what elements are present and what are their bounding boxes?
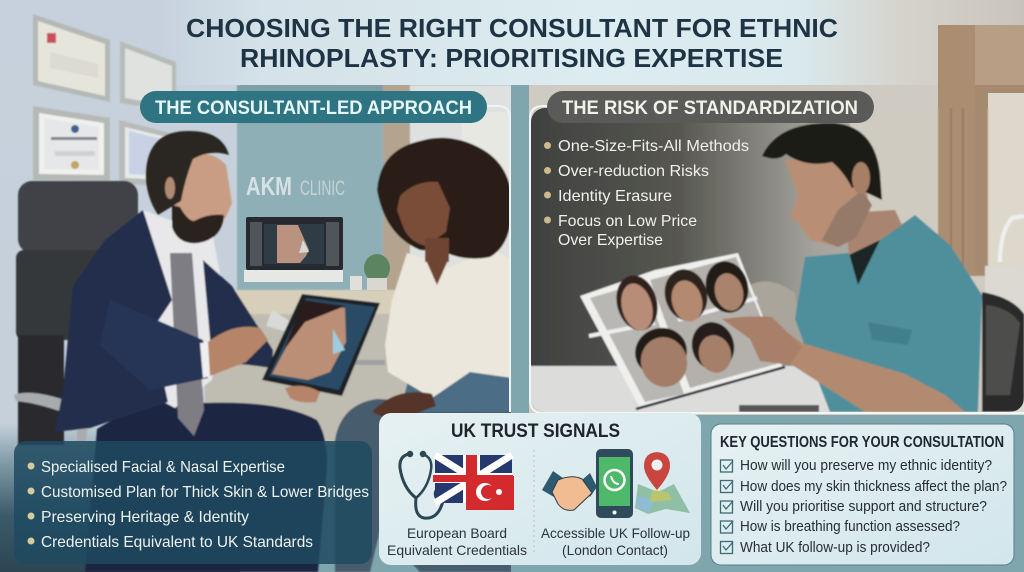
label: credentials: European Board [407, 525, 507, 541]
legs [335, 399, 512, 572]
frame: left panel border [470, 106, 510, 412]
certificate 4 [119, 120, 178, 185]
checklist: Will you prioritise support and structure? [740, 498, 987, 515]
checklist [720, 457, 1007, 556]
label: credentials [387, 525, 527, 558]
wood slats [938, 25, 1024, 275]
icon: map pin [635, 452, 690, 514]
panel: consultant bullet list: Preserving Heritage & Identity [41, 509, 249, 526]
checklist: How is breathing function assessed? [740, 518, 960, 535]
teal divider [512, 85, 529, 415]
title [186, 13, 838, 73]
blouse [385, 248, 512, 398]
checklist: What UK follow-up is provided? [740, 539, 930, 556]
certificates wall [33, 14, 178, 185]
chair [982, 292, 1024, 412]
doorway [988, 93, 1024, 267]
jeans [404, 372, 510, 412]
icon: handshake [542, 471, 597, 510]
hair [762, 123, 882, 200]
beard [172, 205, 224, 243]
ear [165, 177, 175, 199]
neck [845, 210, 902, 255]
desk and floor [234, 289, 396, 315]
hair [377, 138, 512, 259]
table [529, 366, 869, 416]
risk bullet list: One-Size-Fits-All Methods [558, 138, 749, 155]
heading pill: consultant-led approach [140, 91, 487, 123]
face [174, 153, 233, 222]
scrubs [795, 215, 982, 412]
plant [350, 254, 390, 290]
tablet [262, 294, 380, 402]
sleeve [100, 300, 208, 390]
frame: risk panel border [530, 106, 1024, 413]
book of faces [580, 253, 802, 409]
shirt [143, 210, 225, 408]
certificate 1 [33, 14, 110, 102]
label: follow-up: Accessible UK Follow-up [541, 525, 690, 541]
arm [764, 316, 965, 412]
man in suit [55, 131, 327, 572]
face [785, 150, 868, 247]
surgeon [762, 123, 984, 412]
hand [208, 327, 268, 376]
caliper [266, 310, 290, 332]
tie [170, 253, 204, 436]
certificate 3 [33, 106, 110, 181]
risk bullet list: Focus on Low Price [558, 213, 697, 230]
panel: key questions [711, 424, 1014, 565]
right room [529, 25, 1024, 415]
face [397, 182, 450, 246]
heading pill: risk of standardization [547, 91, 874, 123]
icon: stethoscope [400, 452, 449, 518]
hair [146, 131, 229, 215]
risk bullet list [544, 138, 749, 249]
jacket [55, 210, 172, 432]
stubble [822, 190, 872, 247]
woman [335, 138, 512, 572]
risk bullet list: Identity Erasure [558, 188, 672, 205]
clinic sign: AKM [246, 171, 292, 201]
checklist: How will you preserve my ethnic identity? [740, 457, 992, 474]
panel: risk of standardization [529, 106, 1024, 416]
risk bullet list: Over Expertise [558, 232, 663, 249]
label: follow-up: (London Contact) [562, 542, 668, 558]
icon: WhatsApp phone [596, 449, 633, 518]
title: CHOOSING THE RIGHT CONSULTANT FOR ETHNIC [186, 13, 838, 43]
hand [722, 316, 802, 365]
monitor [244, 217, 343, 282]
risk bullet list: Over-reduction Risks [558, 163, 709, 180]
panel: consultant bullet list: Credentials Equivalent to UK Standards [41, 534, 313, 551]
book spine edge [636, 367, 785, 409]
cuff [200, 343, 211, 378]
book photo faces [610, 256, 754, 392]
panel: consultant bullet list: Customised Plan for Thick Skin & Lower Bridges [41, 484, 369, 501]
chair [14, 181, 138, 453]
certificate 2 [120, 41, 176, 112]
label: credentials: Equivalent Credentials [387, 542, 527, 558]
ear [852, 162, 870, 194]
trousers [85, 401, 327, 572]
panel: consultant bullet list [14, 441, 372, 564]
panel: UK trust signals [379, 413, 701, 565]
icon: UK and Turkey flags [433, 455, 514, 510]
hands [372, 392, 436, 417]
clinic wall [236, 123, 384, 290]
heading pill: consultant-led approach: THE CONSULTANT-LED APPROACH [155, 98, 472, 119]
title: RHINOPLASTY: PRIORITISING EXPERTISE [240, 43, 783, 73]
heading pill: risk of standardization: THE RISK OF STANDARDIZATION [562, 98, 858, 119]
panel: consultant-led photo: CLINIC [300, 177, 345, 200]
heading: UK TRUST SIGNALS [451, 421, 620, 442]
label: follow-up [541, 525, 690, 558]
panel: consultant bullet list: Specialised Facial & Nasal Expertise [41, 459, 285, 476]
panel: consultant-led photo [14, 85, 512, 572]
